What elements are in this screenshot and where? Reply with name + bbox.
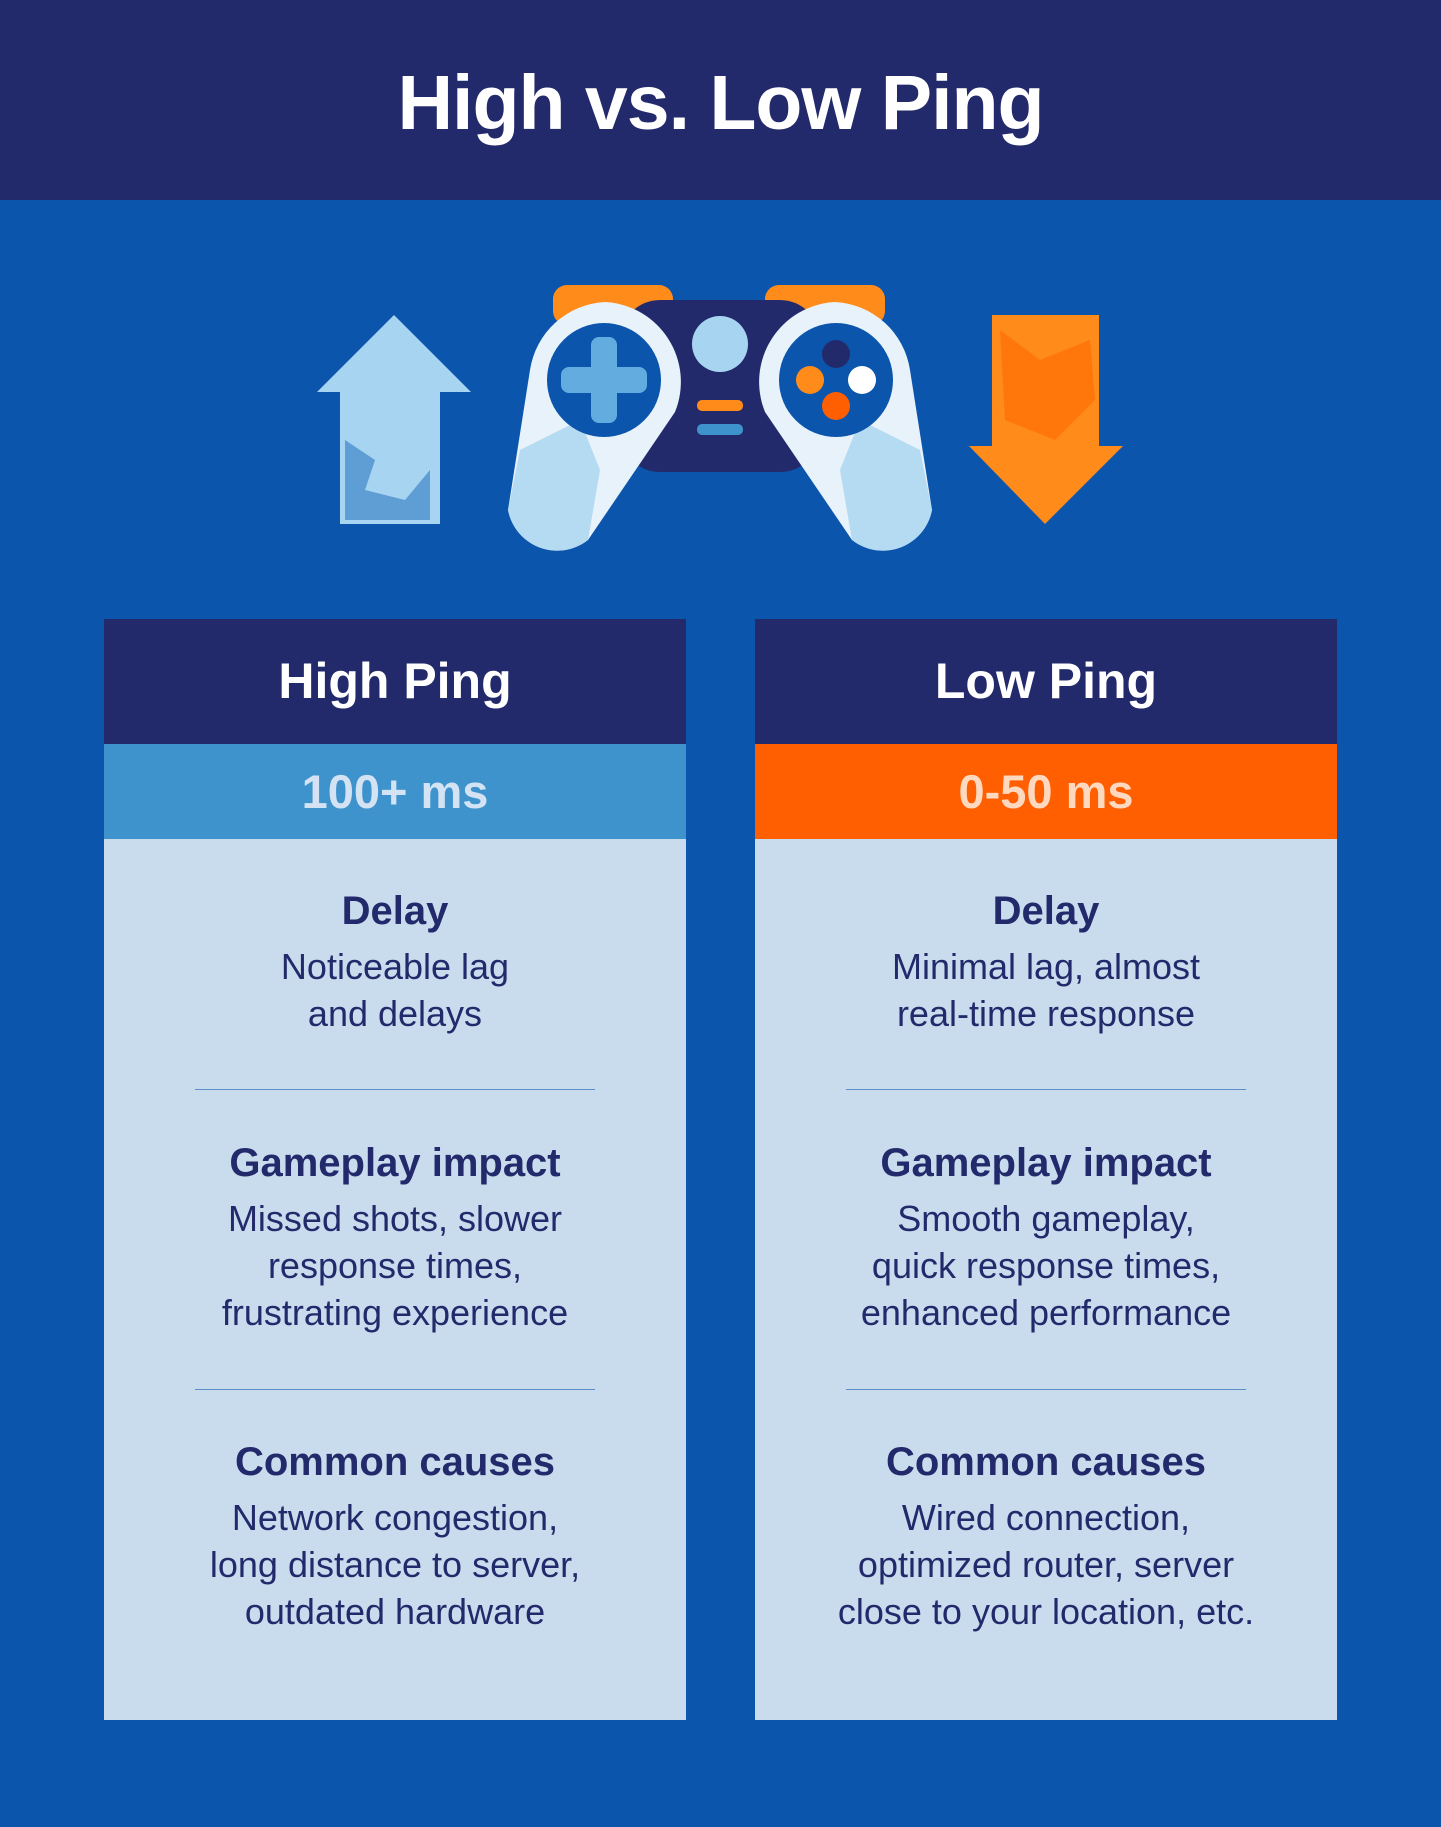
text block: delay <box>892 889 1200 1034</box>
text block: gameplay impact: enhanced performance <box>861 1292 1231 1333</box>
text block: delay: real-time response <box>897 993 1195 1034</box>
text block: common causes: Network congestion, <box>232 1497 558 1538</box>
text block: delay: and delays <box>308 993 482 1034</box>
text block: common causes: Common causes <box>235 1440 555 1484</box>
text block: gameplay impact: Gameplay impact <box>229 1141 561 1185</box>
text block: common causes: Wired connection, <box>902 1497 1190 1538</box>
band: 0-50 ms <box>755 744 1337 839</box>
text block: delay: Delay <box>993 889 1099 933</box>
text block: gameplay impact: Missed shots, slower <box>228 1198 562 1239</box>
icon: game controller <box>508 285 932 551</box>
band: 100+ ms: 100+ ms <box>302 765 488 818</box>
band: 0-50 ms: 0-50 ms <box>958 765 1134 818</box>
text block: common causes: long distance to server, <box>210 1544 580 1585</box>
heading: low ping <box>755 619 1337 744</box>
text block: gameplay impact: quick response times, <box>872 1245 1220 1286</box>
icon: up arrow <box>317 315 471 524</box>
heading: high ping: High Ping <box>278 653 512 709</box>
text block: common causes: optimized router, server <box>858 1544 1234 1585</box>
title: High vs. Low Ping <box>397 60 1044 146</box>
text block: gameplay impact: Gameplay impact <box>880 1141 1212 1185</box>
text block: gameplay impact: Smooth gameplay, <box>897 1198 1195 1239</box>
text block: gameplay impact <box>222 1141 568 1333</box>
text block: common causes: outdated hardware <box>245 1591 545 1632</box>
heading: low ping: Low Ping <box>935 653 1157 709</box>
text block: common causes <box>838 1440 1254 1632</box>
text block: common causes: Common causes <box>886 1440 1206 1484</box>
text block: common causes <box>210 1440 580 1632</box>
text block: delay: Noticeable lag <box>281 946 509 987</box>
heading: high ping <box>104 619 686 744</box>
text block: delay: Delay <box>342 889 448 933</box>
text block: delay: Minimal lag, almost <box>892 946 1200 987</box>
illustration: arrows and controller <box>317 285 1123 551</box>
text block: delay <box>281 889 509 1034</box>
band: 100+ ms <box>104 744 686 839</box>
text block: gameplay impact: frustrating experience <box>222 1292 568 1333</box>
panel: low ping <box>755 619 1337 1720</box>
text block: common causes: close to your location, etc. <box>838 1591 1254 1632</box>
text block: gameplay impact <box>861 1141 1231 1333</box>
panel: high ping <box>104 619 686 1720</box>
icon: down arrow <box>969 315 1123 524</box>
title <box>0 0 1441 200</box>
text block: gameplay impact: response times, <box>268 1245 522 1286</box>
